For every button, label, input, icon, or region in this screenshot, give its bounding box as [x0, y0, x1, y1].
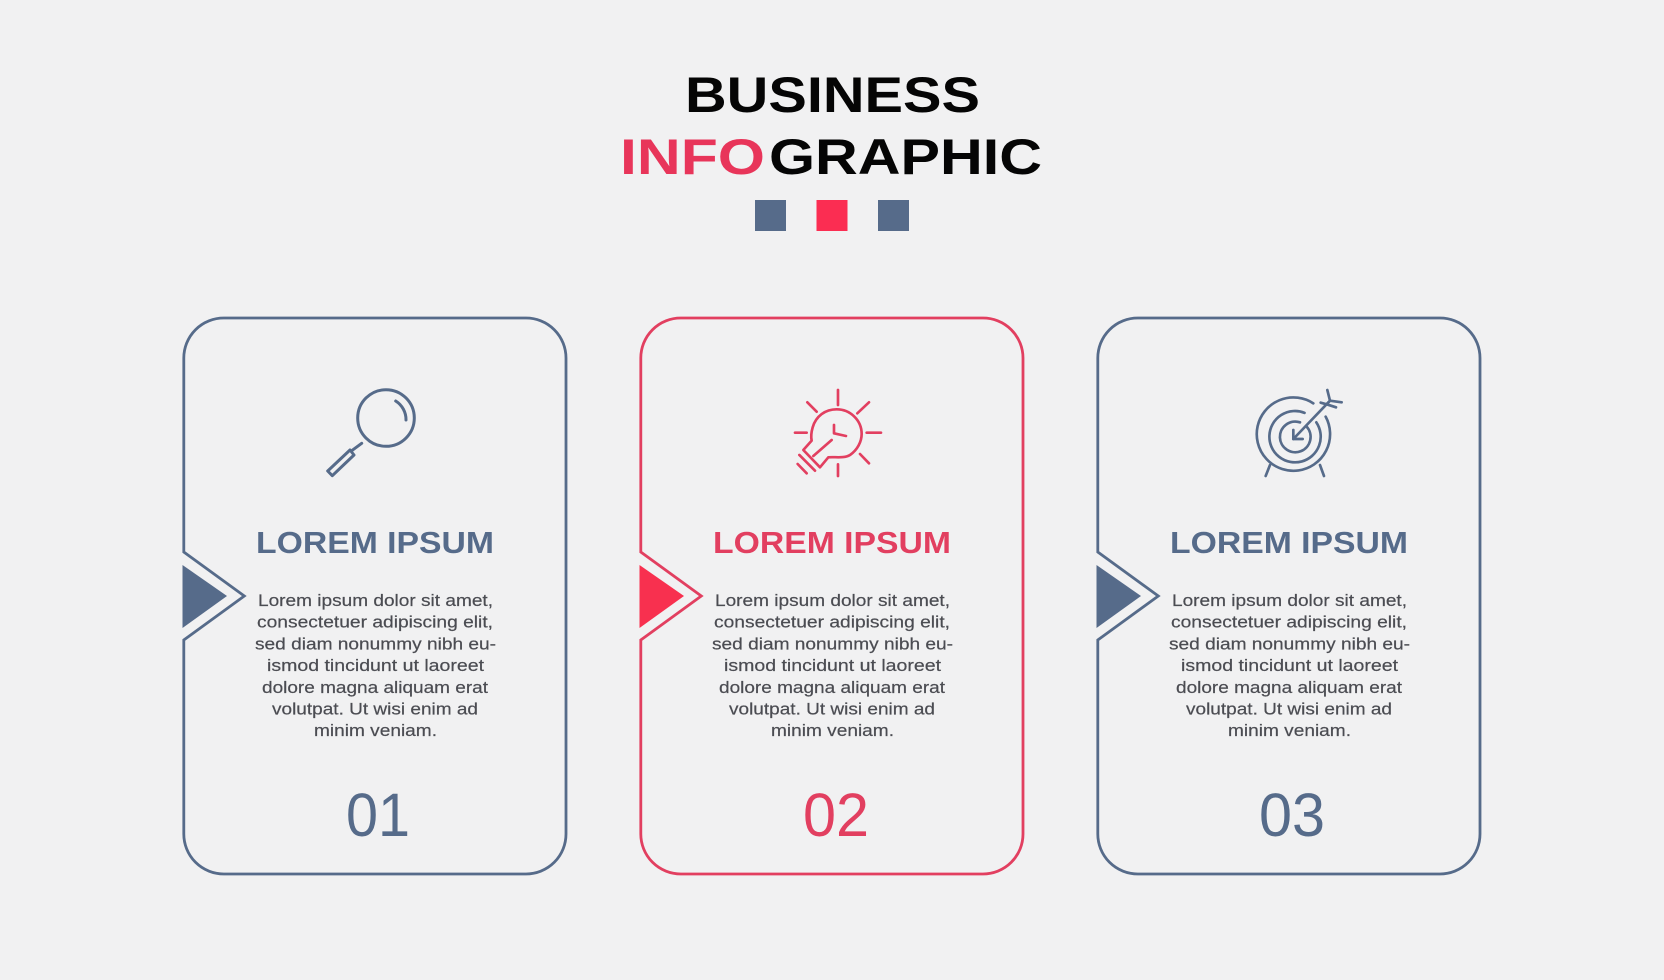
body text 01: Lorem ipsum dolor sit amet,: [258, 592, 493, 610]
body text 03: minim veniam.: [1228, 722, 1351, 740]
body text 03: dolore magna aliquam erat: [1176, 679, 1403, 697]
body text 02: ismod tincidunt ut laoreet: [724, 657, 942, 675]
heading 02: LOREM IPSUM: [713, 525, 951, 560]
body text 02: Lorem ipsum dolor sit amet,: [715, 592, 950, 610]
body text 03: [1169, 592, 1410, 740]
number 03: 03: [1259, 781, 1325, 849]
body text 01: consectetuer adipiscing elit,: [257, 614, 493, 632]
icon: light bulb with clock: [795, 390, 881, 476]
panel: card 03: [1096, 318, 1480, 874]
decorative squares: [755, 200, 909, 231]
card outline 02: [641, 318, 1023, 874]
body text 01: volutpat. Ut wisi enim ad: [272, 700, 478, 718]
body text 01: sed diam nonummy nibh eu-: [255, 635, 496, 653]
body text 01: minim veniam.: [314, 722, 437, 740]
title: [620, 67, 1042, 185]
body text 02: volutpat. Ut wisi enim ad: [729, 700, 935, 718]
body text 01: dolore magna aliquam erat: [262, 679, 489, 697]
body text 02: minim veniam.: [771, 722, 894, 740]
icon: magnifying glass: [328, 390, 414, 476]
body text 01: ismod tincidunt ut laoreet: [267, 657, 485, 675]
heading 01: LOREM IPSUM: [256, 525, 494, 560]
body text 01: [255, 592, 496, 740]
arrow marker 03: [1096, 565, 1141, 628]
body text 02: dolore magna aliquam erat: [719, 679, 946, 697]
number 01: 01: [346, 781, 410, 849]
arrow marker 02: [640, 565, 684, 628]
body text 03: ismod tincidunt ut laoreet: [1181, 657, 1399, 675]
number 02: 02: [803, 781, 869, 849]
body text 03: consectetuer adipiscing elit,: [1171, 614, 1407, 632]
body text 03: sed diam nonummy nibh eu-: [1169, 635, 1410, 653]
card outline 01: [184, 318, 566, 874]
body text 03: Lorem ipsum dolor sit amet,: [1172, 592, 1407, 610]
title line: business: BUSINESS: [685, 67, 980, 123]
body text 02: sed diam nonummy nibh eu-: [712, 635, 953, 653]
title word: info: INFO: [620, 129, 765, 185]
card outline 03: [1098, 318, 1480, 874]
body text 02: consectetuer adipiscing elit,: [714, 614, 950, 632]
icon: target with arrow: [1257, 390, 1342, 476]
heading 03: LOREM IPSUM: [1170, 525, 1408, 560]
panel: card 01: [182, 318, 566, 874]
body text 03: volutpat. Ut wisi enim ad: [1186, 700, 1392, 718]
arrow marker 01: [182, 565, 227, 628]
body text 02: [712, 592, 953, 740]
panel: card 02: [640, 318, 1023, 874]
title word: graphic: GRAPHIC: [769, 129, 1042, 185]
